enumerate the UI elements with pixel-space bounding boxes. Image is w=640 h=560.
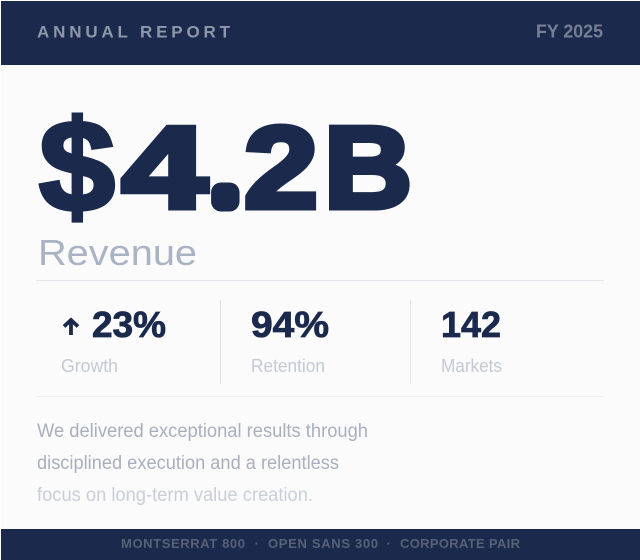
growth value: 23% <box>92 304 166 345</box>
retention label: Retention <box>251 356 325 376</box>
headline figure <box>39 93 412 239</box>
markets label: Markets <box>441 356 502 376</box>
headline figure: B <box>324 102 412 232</box>
body paragraph <box>37 421 368 506</box>
fiscal year: FY 2025 <box>536 22 603 42</box>
growth label: Growth <box>61 356 118 376</box>
column divider 2 <box>410 300 411 384</box>
stat: growth <box>61 304 166 376</box>
footer text: · <box>386 536 391 551</box>
divider bottom <box>36 396 604 397</box>
footer text: MONTSERRAT 800 <box>121 536 245 551</box>
headline figure: 2 <box>244 102 318 232</box>
column divider 1 <box>220 300 221 384</box>
headline label: Revenue <box>38 232 197 273</box>
divider top <box>36 280 604 281</box>
footer band <box>1 529 640 560</box>
header band <box>1 1 640 65</box>
paragraph line 1: We delivered exceptional results through <box>37 421 368 442</box>
markets value: 142 <box>441 304 501 345</box>
header title: ANNUAL REPORT <box>37 22 231 42</box>
stat: markets <box>441 304 502 376</box>
stat: retention <box>251 304 329 376</box>
paragraph line 2: disciplined execution and a relentless <box>37 453 339 474</box>
footer text: OPEN SANS 300 <box>268 536 378 551</box>
headline figure: 4 <box>122 102 207 232</box>
retention value: 94% <box>251 304 329 345</box>
icon: up arrow <box>64 320 78 335</box>
headline figure: $ <box>39 93 115 239</box>
paragraph line 3: focus on long-term value creation. <box>37 485 313 506</box>
headline figure: . <box>217 148 234 214</box>
footer text: · <box>254 536 259 551</box>
footer text: CORPORATE PAIR <box>400 536 521 551</box>
